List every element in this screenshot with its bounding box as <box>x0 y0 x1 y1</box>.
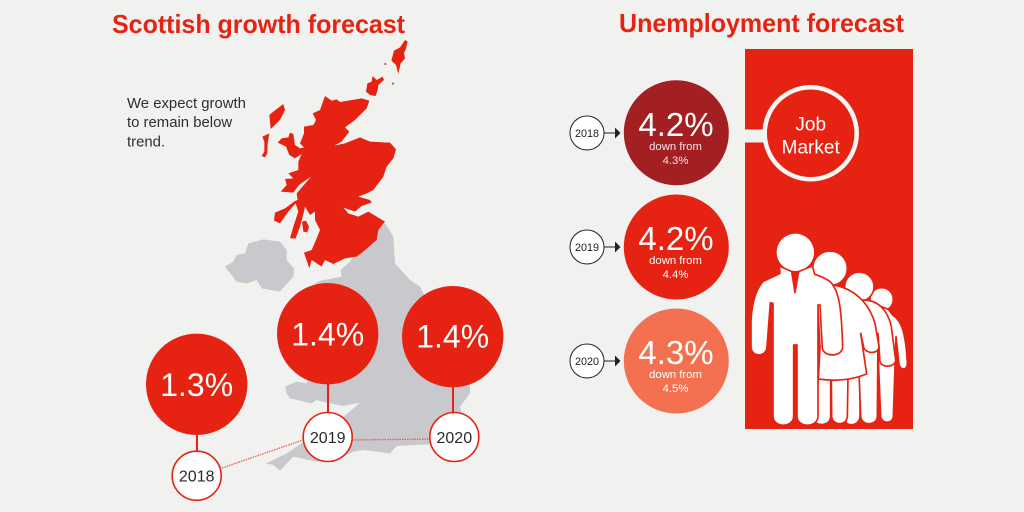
badge: job market <box>765 87 857 179</box>
row: 2020 unemployment 4.3%: 4.5% <box>663 383 688 395</box>
person 1: man <box>751 234 843 425</box>
row: 2018 unemployment 4.2%: 2018 <box>575 128 599 140</box>
map: Northern Ireland <box>225 239 294 292</box>
row: 2018 unemployment 4.2% <box>570 80 729 185</box>
bubble: 2019 growth 1.4%: 1.4% <box>291 317 364 353</box>
dotted line linking years <box>222 439 430 468</box>
person 4 <box>868 288 907 422</box>
row: 2019 unemployment 4.2%: 4.2% <box>638 220 714 257</box>
row: 2019 unemployment 4.2%: down from <box>649 255 702 267</box>
bubble: 2020 growth 1.4%: 2020 <box>437 430 472 447</box>
panel: job market red column <box>745 49 913 429</box>
bubble: 2019 growth 1.4%: 2019 <box>310 430 346 447</box>
mainland Scotland <box>274 96 396 268</box>
title: Scottish growth forecast: Scottish growth forecast <box>112 9 405 39</box>
row: 2019 unemployment 4.2%: 2019 <box>575 242 599 254</box>
bubble: 2020 growth 1.4%: 1.4% <box>416 319 489 355</box>
bubble: 2019 growth 1.4% <box>277 283 378 462</box>
text block: growth expectation: trend. <box>127 134 165 150</box>
person 3 <box>845 272 896 425</box>
map: Scotland highlighted in red <box>262 40 408 268</box>
map: UK regions in grey <box>225 223 470 471</box>
text block: growth expectation: to remain below <box>127 115 232 131</box>
map: England and Wales <box>266 223 470 471</box>
bubble: 2018 growth 1.3% <box>146 334 247 500</box>
badge: job market: Market <box>782 138 840 158</box>
row: 2020 unemployment 4.3%: 4.3% <box>638 334 714 371</box>
row: 2020 unemployment 4.3%: 2020 <box>575 356 599 368</box>
bubble: 2018 growth 1.3%: 1.3% <box>160 367 233 403</box>
row: 2019 unemployment 4.2% <box>570 194 729 300</box>
row: 2018 unemployment 4.2%: down from <box>649 141 702 153</box>
bubble: 2018 growth 1.3%: 2018 <box>179 468 215 486</box>
badge: job market: Job <box>795 114 826 136</box>
icon: queue of people <box>751 234 907 425</box>
row: 2018 unemployment 4.2%: 4.2% <box>638 106 714 143</box>
text block: growth expectation <box>127 96 246 150</box>
islands <box>269 104 285 129</box>
title: Unemployment forecast: Unemployment forecast <box>619 8 904 38</box>
connector: 2018 bubble to job market <box>725 130 765 142</box>
row: 2020 unemployment 4.3%: down from <box>649 369 702 381</box>
row: 2020 unemployment 4.3% <box>570 308 729 414</box>
text block: growth expectation: We expect growth <box>127 96 246 112</box>
row: 2018 unemployment 4.2%: 4.3% <box>663 155 688 167</box>
row: 2019 unemployment 4.2%: 4.4% <box>663 269 688 281</box>
bubble: 2020 growth 1.4% <box>402 286 503 462</box>
person 2: woman <box>813 251 879 424</box>
